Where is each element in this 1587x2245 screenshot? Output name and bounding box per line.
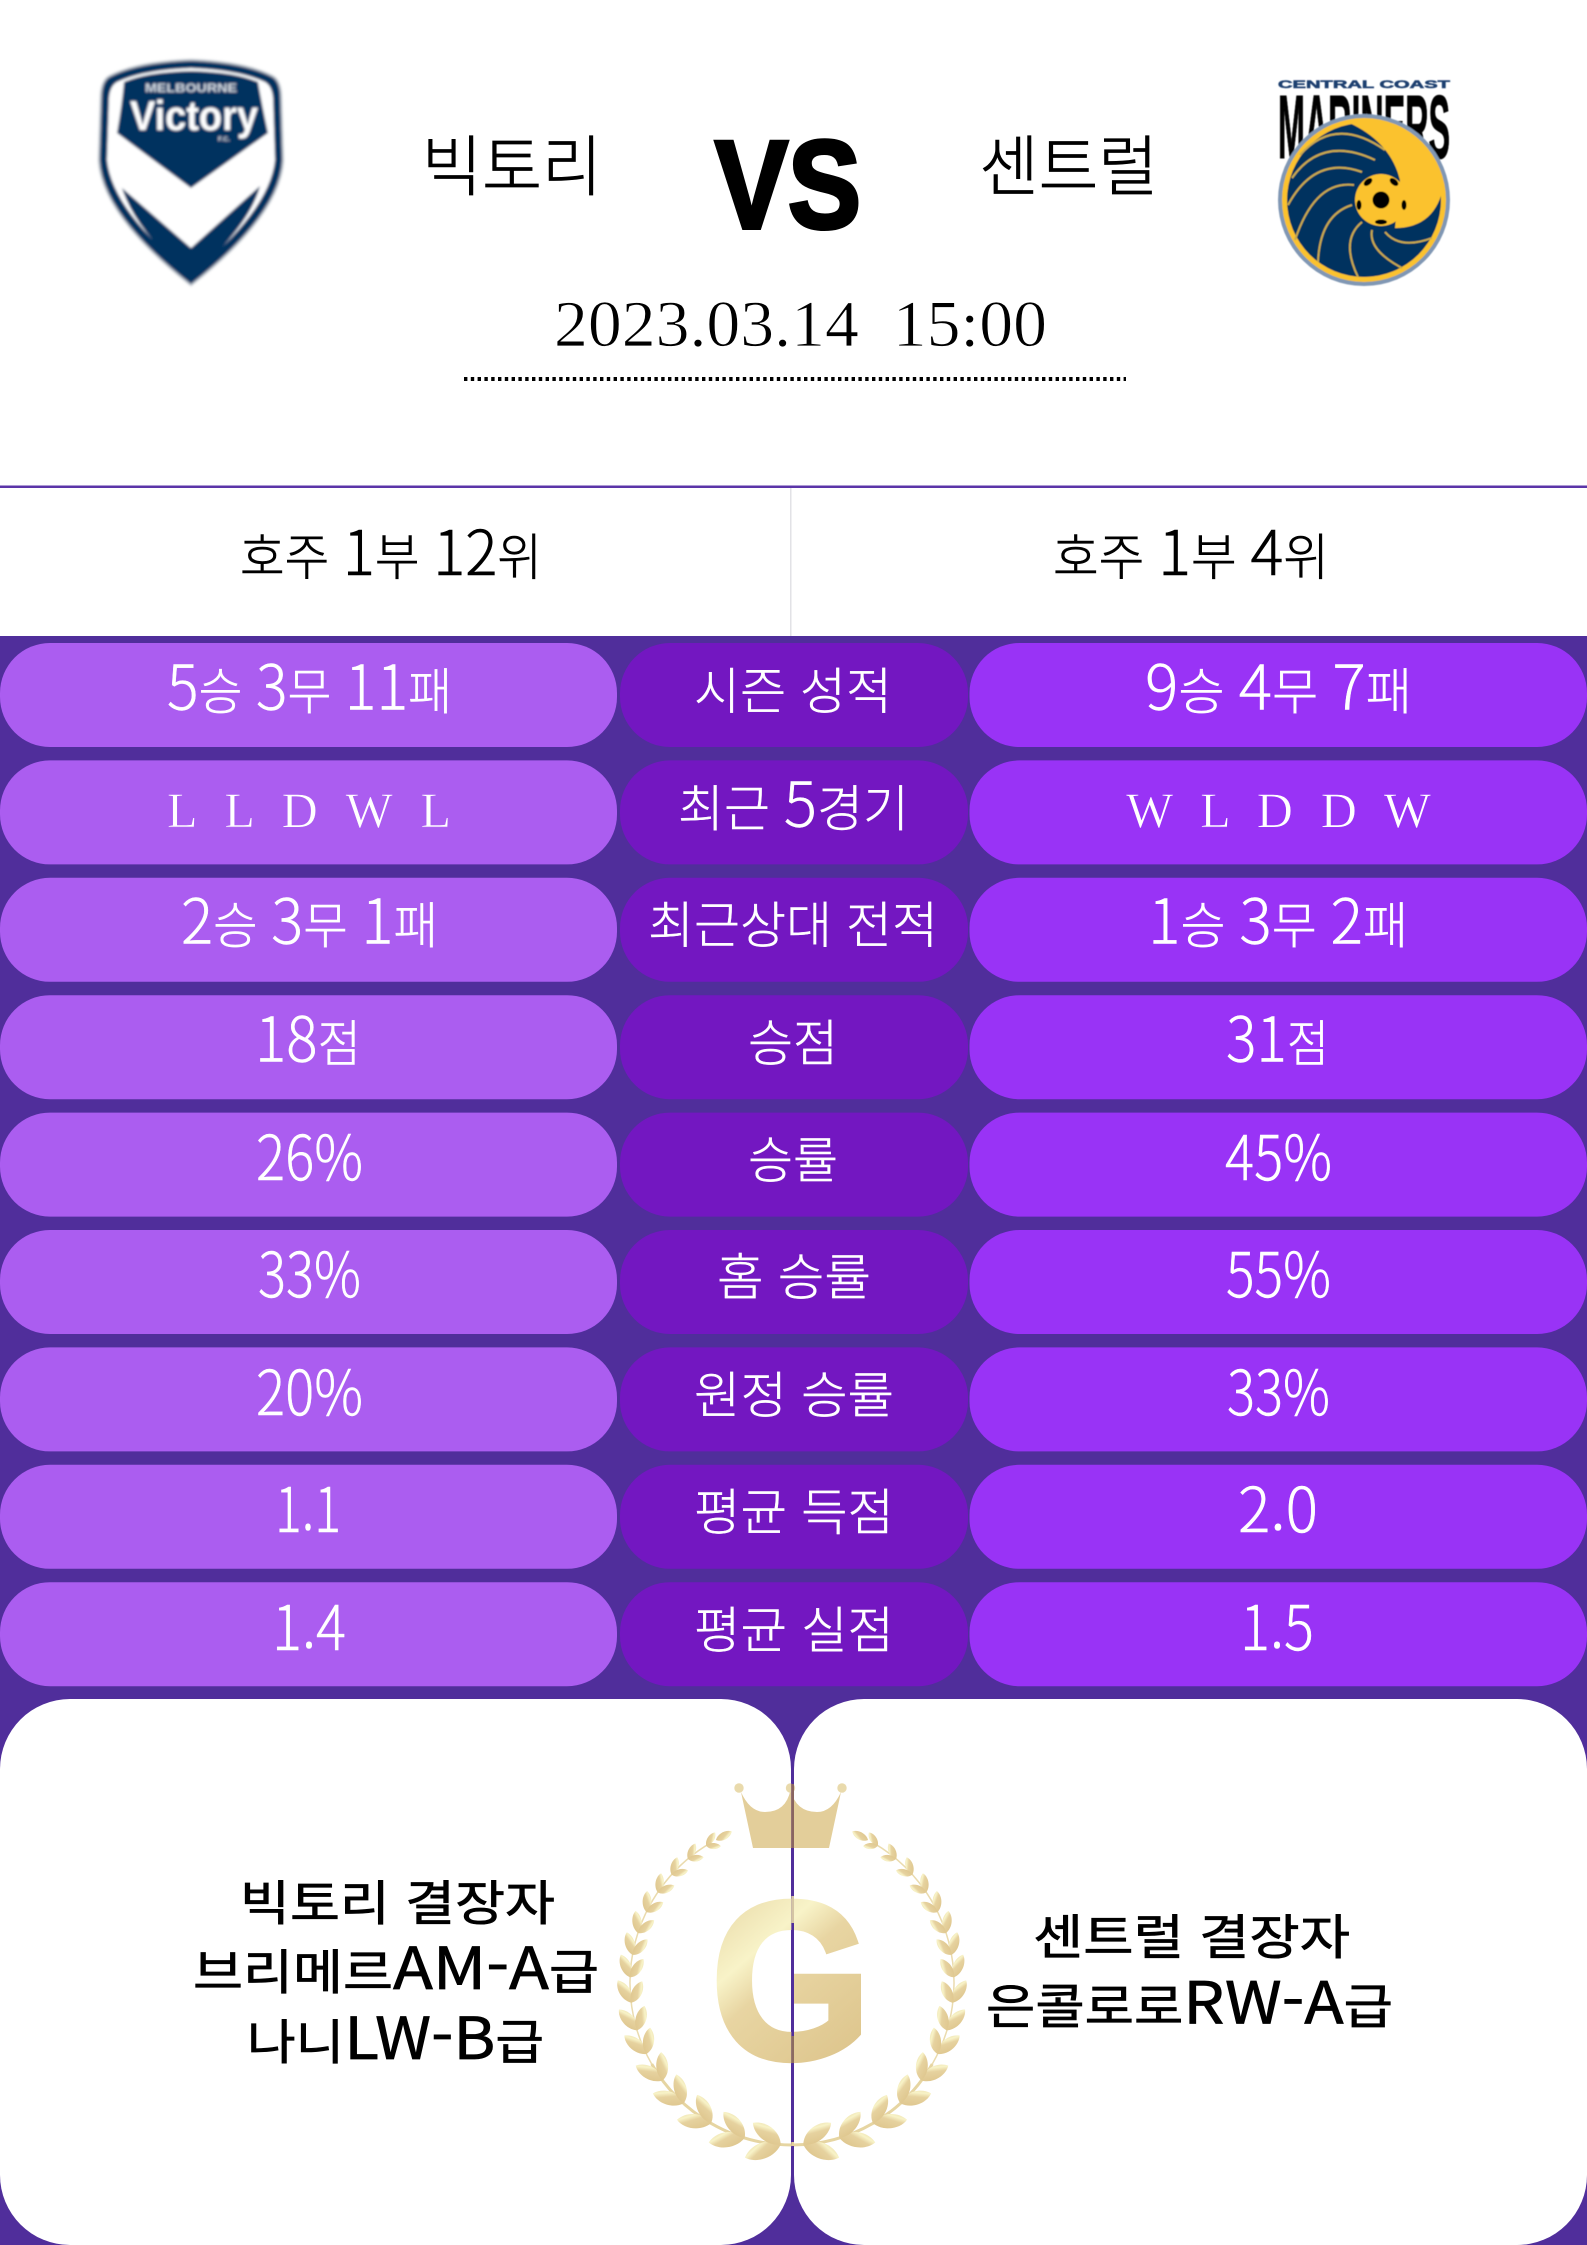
row: last five matches: W L D D W <box>1126 782 1432 838</box>
letter G: G <box>711 1856 871 2106</box>
icon: Central Coast Mariners crest: CENTRAL COAST <box>1278 79 1450 91</box>
crown <box>734 1783 847 1848</box>
panel: away absentees <box>794 1699 1587 2245</box>
away rank: 호주 1부 4위 <box>1053 503 1329 593</box>
row: home win rate: 55% <box>1226 1225 1331 1315</box>
row: points: 31점 <box>1226 990 1329 1080</box>
purple header rule <box>0 486 1587 488</box>
dotted underline <box>464 377 1126 381</box>
title: away team name: 센트럴 <box>979 114 1158 210</box>
title: home team name: 빅토리 <box>422 114 602 210</box>
row: goals conceded: 평균 실점 <box>694 1591 894 1663</box>
row: goals conceded: 1.5 <box>1240 1578 1314 1668</box>
row: goals scored <box>0 1460 1587 1569</box>
row: head to head: 최근상대 전적 <box>648 886 938 958</box>
icon: Melbourne Victory crest: Victory <box>130 92 259 139</box>
row: season record: 시즌 성적 <box>694 652 892 724</box>
home absentee player: 브리메르 AM-A 급 <box>193 1922 599 2006</box>
home rank: 호주 1부 12위 <box>240 503 542 593</box>
panel: league rank row <box>240 488 1329 636</box>
row: away win rate: 33% <box>1227 1343 1330 1433</box>
title: VS: VS <box>715 116 861 255</box>
icon: Melbourne Victory crest: F.C. <box>218 137 230 143</box>
laurel branch right <box>792 1828 971 2167</box>
row: home win rate: 33% <box>258 1225 361 1315</box>
row: away win rate: 20% <box>256 1343 363 1433</box>
row: away win rate <box>0 1343 1587 1451</box>
row: goals scored: 평균 득점 <box>694 1473 894 1545</box>
row: last five matches: L L D W L <box>167 782 451 838</box>
row: points: 승점 <box>748 1004 838 1076</box>
away absentee heading: 센트럴 결장자 <box>1033 1898 1350 1968</box>
row: points <box>0 990 1587 1099</box>
row: head to head: 1승 3무 2패 <box>1148 872 1408 962</box>
panel: purple stats background <box>0 636 1587 2245</box>
away absentee player: 은콜로로 RW-A 급 <box>986 1956 1393 2040</box>
row: win rate: 승률 <box>748 1121 838 1193</box>
panel: home absentees <box>0 1699 791 2245</box>
row: last five matches: 최근 5경기 <box>678 754 909 844</box>
icon: Central Coast Mariners crest <box>1278 78 1450 286</box>
stats table <box>0 638 1587 1686</box>
row: away win rate: 원정 승률 <box>694 1356 894 1428</box>
row: season record: 9승 4무 7패 <box>1145 638 1412 728</box>
date and time: 2023.03.14 15:00 <box>554 288 1047 361</box>
icon: Melbourne Victory crest: MELBOURNE <box>145 81 237 95</box>
row: win rate: 45% <box>1225 1108 1332 1198</box>
row: goals conceded <box>0 1578 1587 1686</box>
laurel branch left <box>613 1828 792 2167</box>
row: head to head: 2승 3무 1패 <box>181 872 438 962</box>
icon: gold laurel wreath, crown and G emblem <box>613 1770 971 2170</box>
row: last five matches <box>0 754 1587 864</box>
row: goals scored: 2.0 <box>1238 1460 1318 1550</box>
home absentee heading: 빅토리 결장자 <box>240 1864 555 1934</box>
row: head to head <box>0 872 1587 982</box>
row: goals conceded: 1.4 <box>272 1578 346 1668</box>
row: home win rate <box>0 1225 1587 1334</box>
row: win rate: 26% <box>256 1108 363 1198</box>
row: season record <box>0 638 1587 747</box>
row: goals scored: 1.1 <box>275 1460 341 1550</box>
row: home win rate: 홈 승률 <box>717 1238 871 1310</box>
row: win rate <box>0 1108 1587 1217</box>
home absentee player: 나니LW-B 급 <box>247 1992 544 2076</box>
icon: Melbourne Victory crest <box>99 60 283 285</box>
row: season record: 5승 3무 11패 <box>167 638 452 728</box>
row: points: 18점 <box>255 990 361 1080</box>
